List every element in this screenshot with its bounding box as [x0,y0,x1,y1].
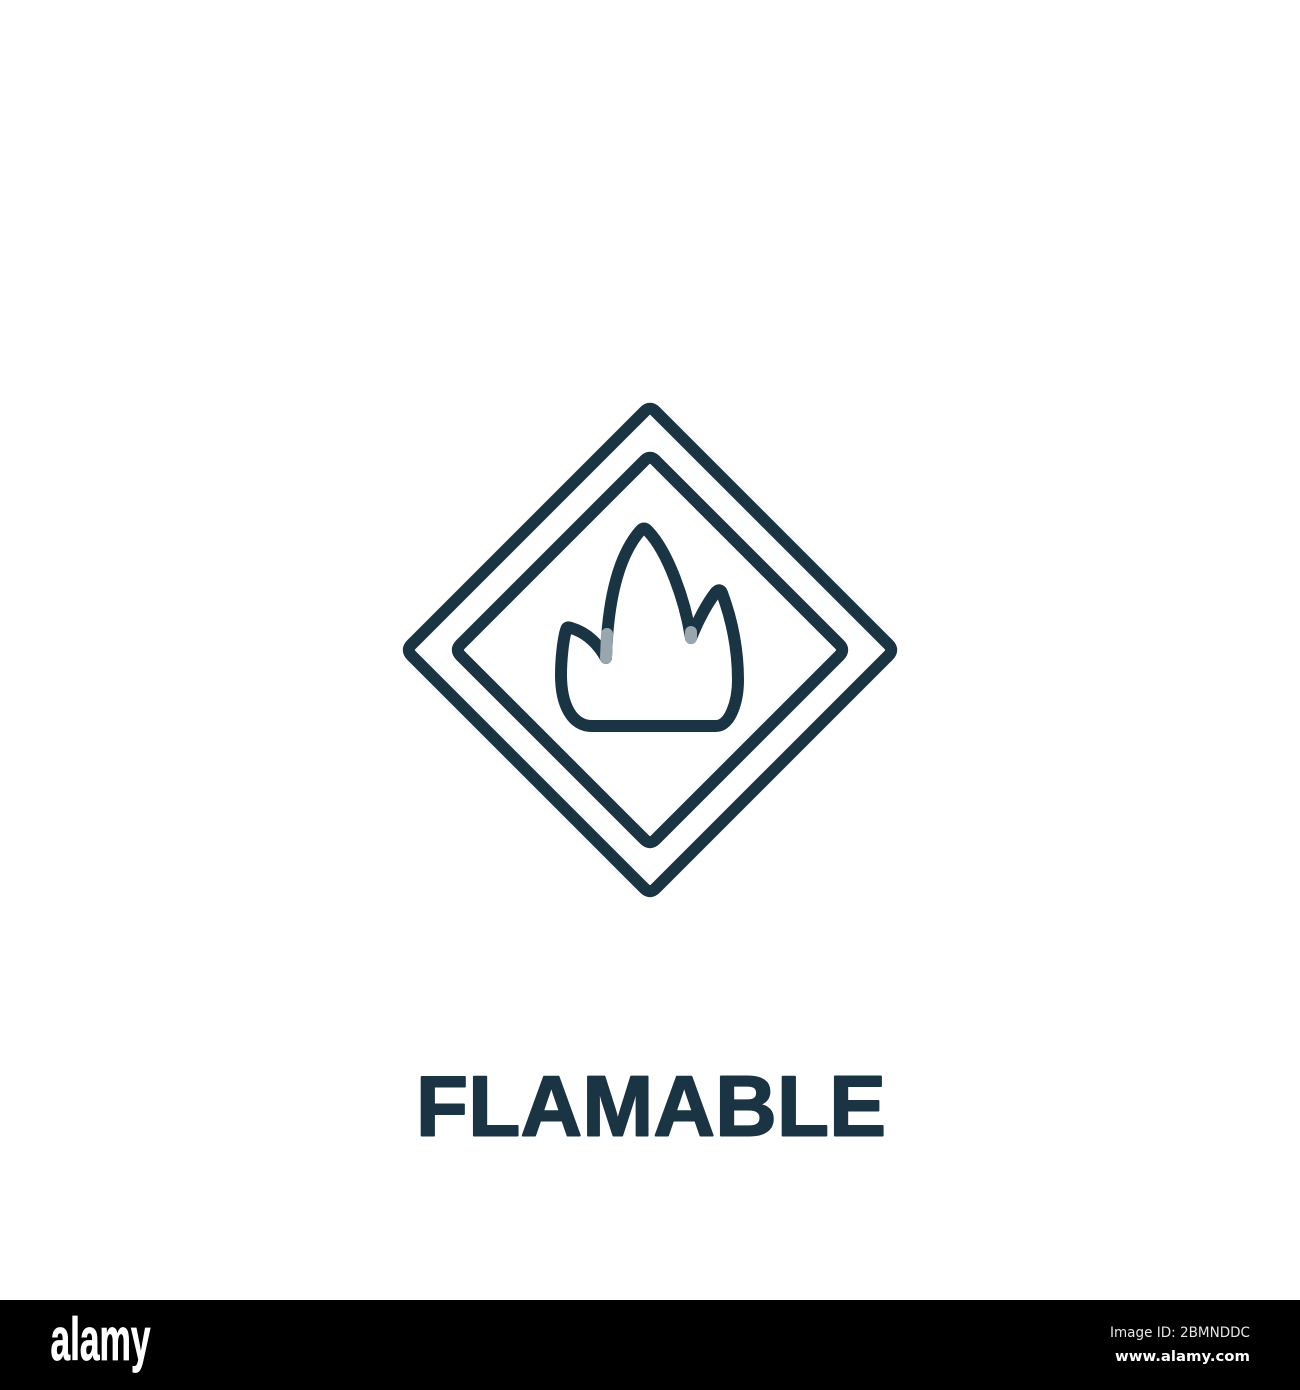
icon: outer diamond [409,409,891,891]
footer bar [0,1300,1300,1390]
title: FLAMABLE [416,1060,886,1154]
watermark traces on flame [606,632,691,658]
footer logo: alamy [50,1306,151,1373]
icon: inner diamond [458,458,842,842]
website: www.alamy.com [1115,1349,1250,1365]
icon: flame [561,528,738,726]
icon: flammable warning sign [409,409,891,891]
image id: Image ID: 2BMNDDC [1110,1325,1250,1341]
